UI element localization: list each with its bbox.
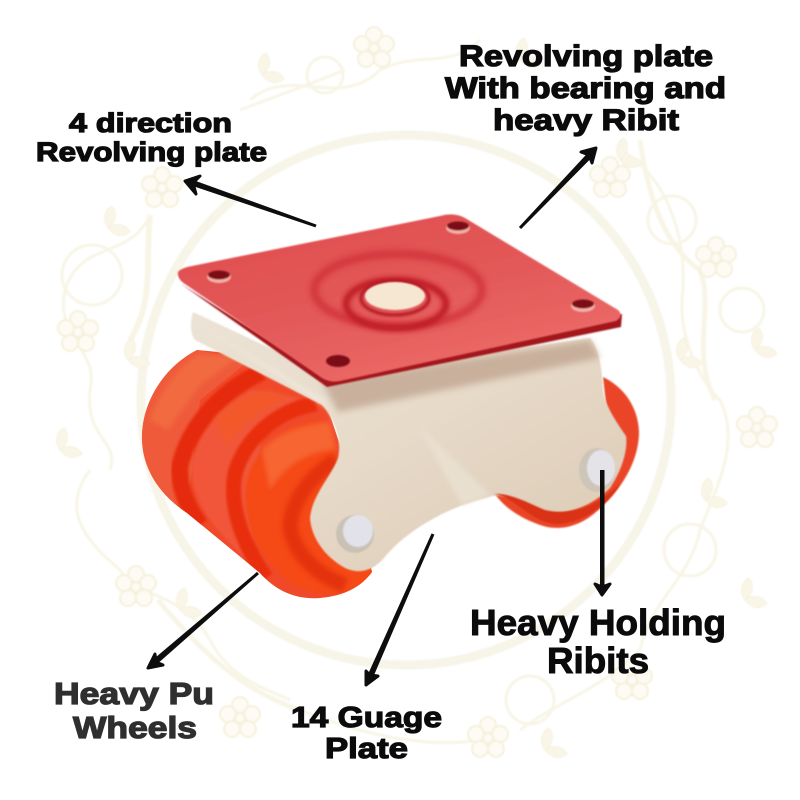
rear wheel rim under body [494,484,620,524]
label: revolving plate with bearing and heavy ribit: Revolving plate [459,40,713,73]
front lobe inner rim [290,460,345,585]
body shadow under plate [322,340,600,412]
label: heavy pu wheels: Heavy Pu [54,676,214,711]
plate centre dimple [314,254,482,328]
rear wheel [495,377,639,528]
middle lobe [192,390,300,565]
cream fork body [191,312,626,571]
label: revolving plate with bearing and heavy ribit: heavy Ribit [493,104,679,137]
first groove [180,372,262,525]
label: revolving plate with bearing and heavy ribit: With bearing and [445,72,726,105]
label: heavy holding ribits [470,602,726,681]
label: 4 direction revolving plate: 4 direction [69,108,232,138]
second groove [234,404,316,578]
back lobe [142,350,250,513]
top mounting plate [178,214,622,387]
caster wheel product image [130,214,639,610]
label: heavy holding ribits: Ribits [547,640,649,681]
label: 14 guage plate: Plate [325,733,408,765]
plate screw holes [207,222,595,367]
label: heavy holding ribits: Heavy Holding [470,602,726,643]
arrow: revolving plate with bearing [519,148,596,229]
label: heavy pu wheels: Wheels [73,710,197,745]
label: 4 direction revolving plate [36,108,267,167]
front triple wheels [142,350,372,598]
label: 14 guage plate: 14 Guage [291,702,442,734]
label: 4 direction revolving plate: Revolving plate [36,137,267,167]
front lobe highlight [262,422,336,490]
front lobe [245,420,374,594]
arrow: heavy holding ribits [595,470,610,595]
label: revolving plate with bearing and heavy ribit [445,40,726,137]
arrow: 14 guage plate [366,533,434,685]
arrow: 4 direction revolving plate [185,176,316,227]
watermark wedge [418,425,490,505]
label: heavy pu wheels [54,676,214,745]
wheel silhouette base [142,350,372,598]
label: 14 guage plate [291,702,442,765]
middle lobe highlight [216,391,284,443]
rivets [336,448,615,553]
arrow: heavy pu wheels [148,572,259,668]
back lobe highlight [150,355,240,430]
body fold highlight [200,325,340,440]
